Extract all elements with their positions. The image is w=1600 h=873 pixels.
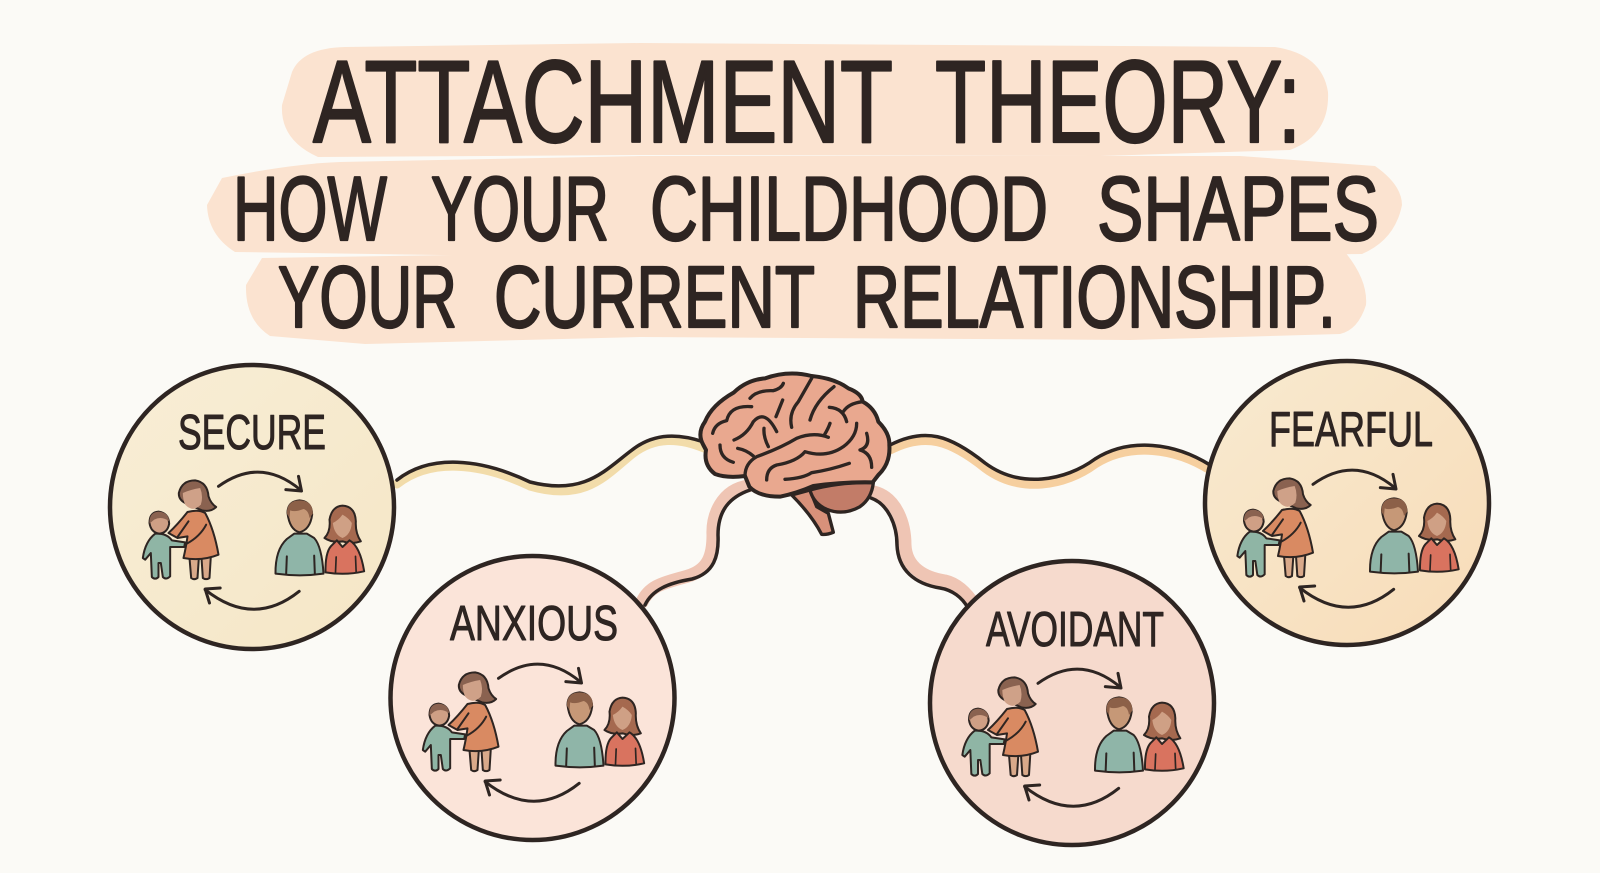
avoidant circle bbox=[930, 561, 1214, 845]
title line 3: CURRENT bbox=[494, 249, 815, 346]
title line 2: SHAPES bbox=[1097, 159, 1379, 260]
icon: parent, child and adult couple with cycle arrows bbox=[962, 669, 1184, 806]
title line 2: YOUR bbox=[431, 159, 609, 260]
secure label: SECURE bbox=[178, 406, 326, 460]
connector: avoidant to brain bbox=[871, 492, 975, 608]
brain folds bbox=[713, 378, 872, 480]
title line 1: ATTACHMENT bbox=[313, 36, 893, 167]
brain stem bbox=[792, 490, 833, 534]
panel: fearful bbox=[1205, 361, 1489, 645]
avoidant label: AVOIDANT bbox=[986, 603, 1164, 657]
panel: avoidant bbox=[930, 561, 1214, 845]
icon: parent, child and adult couple with cycle arrows bbox=[423, 664, 644, 801]
anxious circle bbox=[390, 556, 674, 840]
title highlight band 1 bbox=[282, 43, 1328, 157]
connector: anxious to brain bbox=[642, 486, 750, 605]
cerebellum bbox=[810, 483, 873, 512]
title line 3: YOUR bbox=[278, 249, 457, 346]
anxious label: ANXIOUS bbox=[450, 597, 618, 651]
connector: fearful to brain bbox=[890, 435, 1210, 484]
panel: anxious bbox=[390, 556, 674, 840]
title line 3: RELATIONSHIP. bbox=[853, 249, 1336, 346]
icon: brain bbox=[700, 373, 889, 534]
title highlight band 3 bbox=[246, 252, 1366, 344]
icon: parent, child and adult couple with cycle arrows bbox=[1237, 470, 1459, 607]
panel: secure bbox=[110, 365, 394, 649]
title line 2: HOW bbox=[233, 159, 387, 260]
title line 1: THEORY: bbox=[935, 36, 1301, 167]
cerebrum bbox=[700, 373, 889, 497]
fearful circle bbox=[1205, 361, 1489, 645]
title bbox=[207, 36, 1402, 346]
title line 2: CHILDHOOD bbox=[650, 159, 1048, 260]
icon: parent, child and adult couple with cycle arrows bbox=[143, 472, 364, 609]
secure circle bbox=[110, 365, 394, 649]
title highlight band 2 bbox=[207, 156, 1402, 258]
connector: secure to brain bbox=[397, 436, 704, 491]
fearful label: FEARFUL bbox=[1269, 403, 1433, 457]
